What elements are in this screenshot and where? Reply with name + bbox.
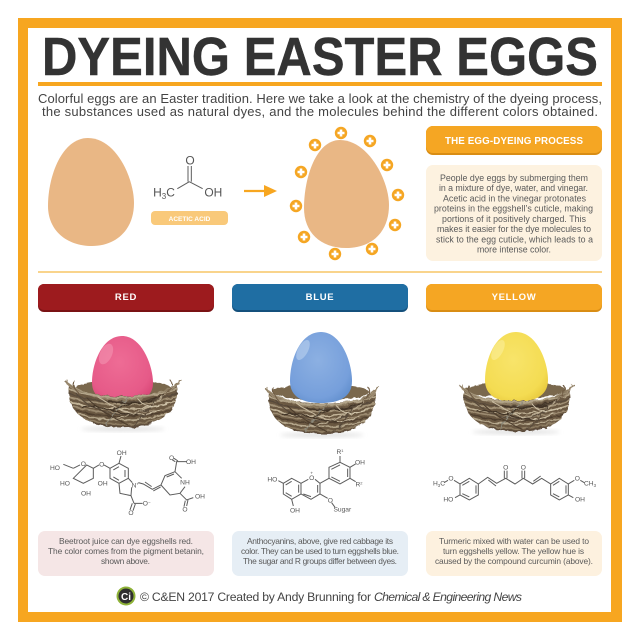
process text panel xyxy=(426,165,602,261)
red caption: shown above. xyxy=(101,556,150,566)
blue heading xyxy=(232,284,408,312)
betanin molecule: OH xyxy=(186,459,196,466)
blue caption: color. They can be used to turn eggshells blue. xyxy=(241,546,399,556)
title: DYEING EASTER EGGS xyxy=(42,26,598,87)
betanin molecule: − xyxy=(148,500,151,505)
process text panel: makes it easier for the dye molecules to xyxy=(437,224,591,234)
acetic acid molecule xyxy=(153,153,222,201)
betanin molecule: O xyxy=(99,462,104,469)
anthocyanin molecule: 1 xyxy=(341,448,344,453)
credit text xyxy=(140,590,522,604)
anthocyanin molecule xyxy=(267,448,365,515)
process heading xyxy=(426,126,602,155)
betanin molecule: NH xyxy=(180,480,190,487)
betanin molecule: OH xyxy=(98,481,108,488)
yellow egg in nest xyxy=(460,332,574,434)
panel: yellow xyxy=(426,284,602,576)
curcumin molecule: O xyxy=(503,465,508,472)
process text panel: stick to the egg cuticle, which leads to a xyxy=(436,234,593,244)
yellow caption: Turmeric mixed with water can be used to xyxy=(439,536,589,546)
curcumin molecule: C xyxy=(440,481,445,488)
red heading: RED xyxy=(115,292,137,303)
betanin molecule: O xyxy=(182,507,188,514)
red caption xyxy=(38,531,214,576)
anthocyanin molecule: Sugar xyxy=(333,506,352,513)
anthocyanin molecule: OH xyxy=(290,508,300,515)
panel: red xyxy=(38,284,214,576)
curcumin molecule: HO xyxy=(443,496,453,503)
betanin molecule: HO xyxy=(50,465,60,472)
red heading xyxy=(38,284,214,312)
yellow caption: caused by the compound curcumin (above). xyxy=(435,556,593,566)
curcumin molecule: H xyxy=(433,481,438,488)
blue egg in nest xyxy=(265,332,379,437)
anthocyanin molecule: R xyxy=(336,449,341,456)
betanin molecule: OH xyxy=(117,450,127,457)
curcumin molecule: O xyxy=(575,475,580,482)
anthocyanin molecule: O xyxy=(309,475,314,482)
panel: egg-dyeing diagram xyxy=(48,127,404,260)
yellow heading: YELLOW xyxy=(492,292,536,303)
red caption: Beetroot juice can dye eggshells red. xyxy=(59,536,193,546)
acetic acid molecule: 3 xyxy=(162,192,167,201)
intro text xyxy=(38,91,602,119)
acetic acid molecule: O xyxy=(185,153,195,167)
acetic acid label xyxy=(151,211,228,225)
acetic acid molecule: OH xyxy=(204,185,222,199)
betanin molecule: O xyxy=(128,510,134,517)
blue heading: BLUE xyxy=(306,292,334,303)
curcumin molecule: CH xyxy=(584,481,594,488)
betanin molecule xyxy=(50,450,205,517)
credit text: © C&EN 2017 Created by Andy Brunning for xyxy=(140,590,371,604)
betanin molecule: O xyxy=(81,461,86,468)
process heading: THE EGG-DYEING PROCESS xyxy=(445,136,583,147)
anthocyanin molecule: + xyxy=(310,471,313,477)
betanin molecule: + xyxy=(136,481,139,486)
betanin molecule: HO xyxy=(60,481,70,488)
yellow heading xyxy=(426,284,602,312)
acetic acid molecule: C xyxy=(166,185,175,199)
arrow xyxy=(244,185,277,197)
process text panel: Acetic acid in the vinegar protonates xyxy=(443,194,587,204)
icon: Ci logo: Ci xyxy=(121,592,131,603)
intro text: the substances used as natural dyes, and the molecules behind the different colors obtained. xyxy=(42,104,598,119)
blue caption: The sugar and R groups differ between dyes. xyxy=(243,556,397,566)
anthocyanin molecule: O xyxy=(328,497,333,504)
yellow caption: turn eggshells yellow. The yellow hue is xyxy=(443,546,584,556)
icon: charged egg xyxy=(304,140,389,248)
intro text: Colorful eggs are an Easter tradition. Here we take a look at the chemistry of the dyeing process, xyxy=(38,91,602,106)
curcumin molecule: OH xyxy=(575,496,585,503)
footer credit xyxy=(116,586,522,606)
anthocyanin molecule: OH xyxy=(355,460,365,467)
betanin molecule: OH xyxy=(81,491,91,498)
betanin molecule: O xyxy=(169,455,174,462)
process text panel: portions of it positively charged. This xyxy=(442,214,587,224)
blue caption: Anthocyanins, above, give red cabbage its xyxy=(247,536,393,546)
red egg in nest xyxy=(65,336,181,431)
anthocyanin molecule: R xyxy=(355,481,360,488)
betanin molecule: OH xyxy=(195,494,205,501)
curcumin molecule xyxy=(433,465,597,503)
divider xyxy=(38,271,602,273)
process text panel: People dye eggs by submerging them xyxy=(440,173,588,183)
red caption: The color comes from the pigment betanin, xyxy=(48,546,204,556)
icon: plain egg xyxy=(48,138,134,246)
title rule xyxy=(38,82,602,86)
process text panel: in a mixture of dye, water, and vinegar. xyxy=(439,183,588,193)
anthocyanin molecule: HO xyxy=(267,476,277,483)
panel: blue xyxy=(232,284,408,576)
process text panel: more intense color. xyxy=(477,244,551,254)
curcumin molecule: 3 xyxy=(594,483,597,488)
blue caption xyxy=(232,531,408,576)
process text panel: proteins in the eggshell’s cuticle, making xyxy=(434,204,593,214)
credit text: Chemical & Engineering News xyxy=(374,590,522,604)
positive charges xyxy=(290,127,404,260)
yellow caption xyxy=(426,531,602,576)
anthocyanin molecule: 2 xyxy=(360,480,363,485)
icon: Ci logo xyxy=(116,586,136,606)
curcumin molecule: O xyxy=(521,465,526,472)
betanin molecule: O xyxy=(143,501,148,508)
acetic acid molecule: H xyxy=(153,185,162,199)
acetic acid label: ACETIC ACID xyxy=(169,216,211,223)
betanin molecule: N xyxy=(132,482,136,489)
curcumin molecule: 3 xyxy=(438,483,441,488)
curcumin molecule: O xyxy=(448,475,454,482)
